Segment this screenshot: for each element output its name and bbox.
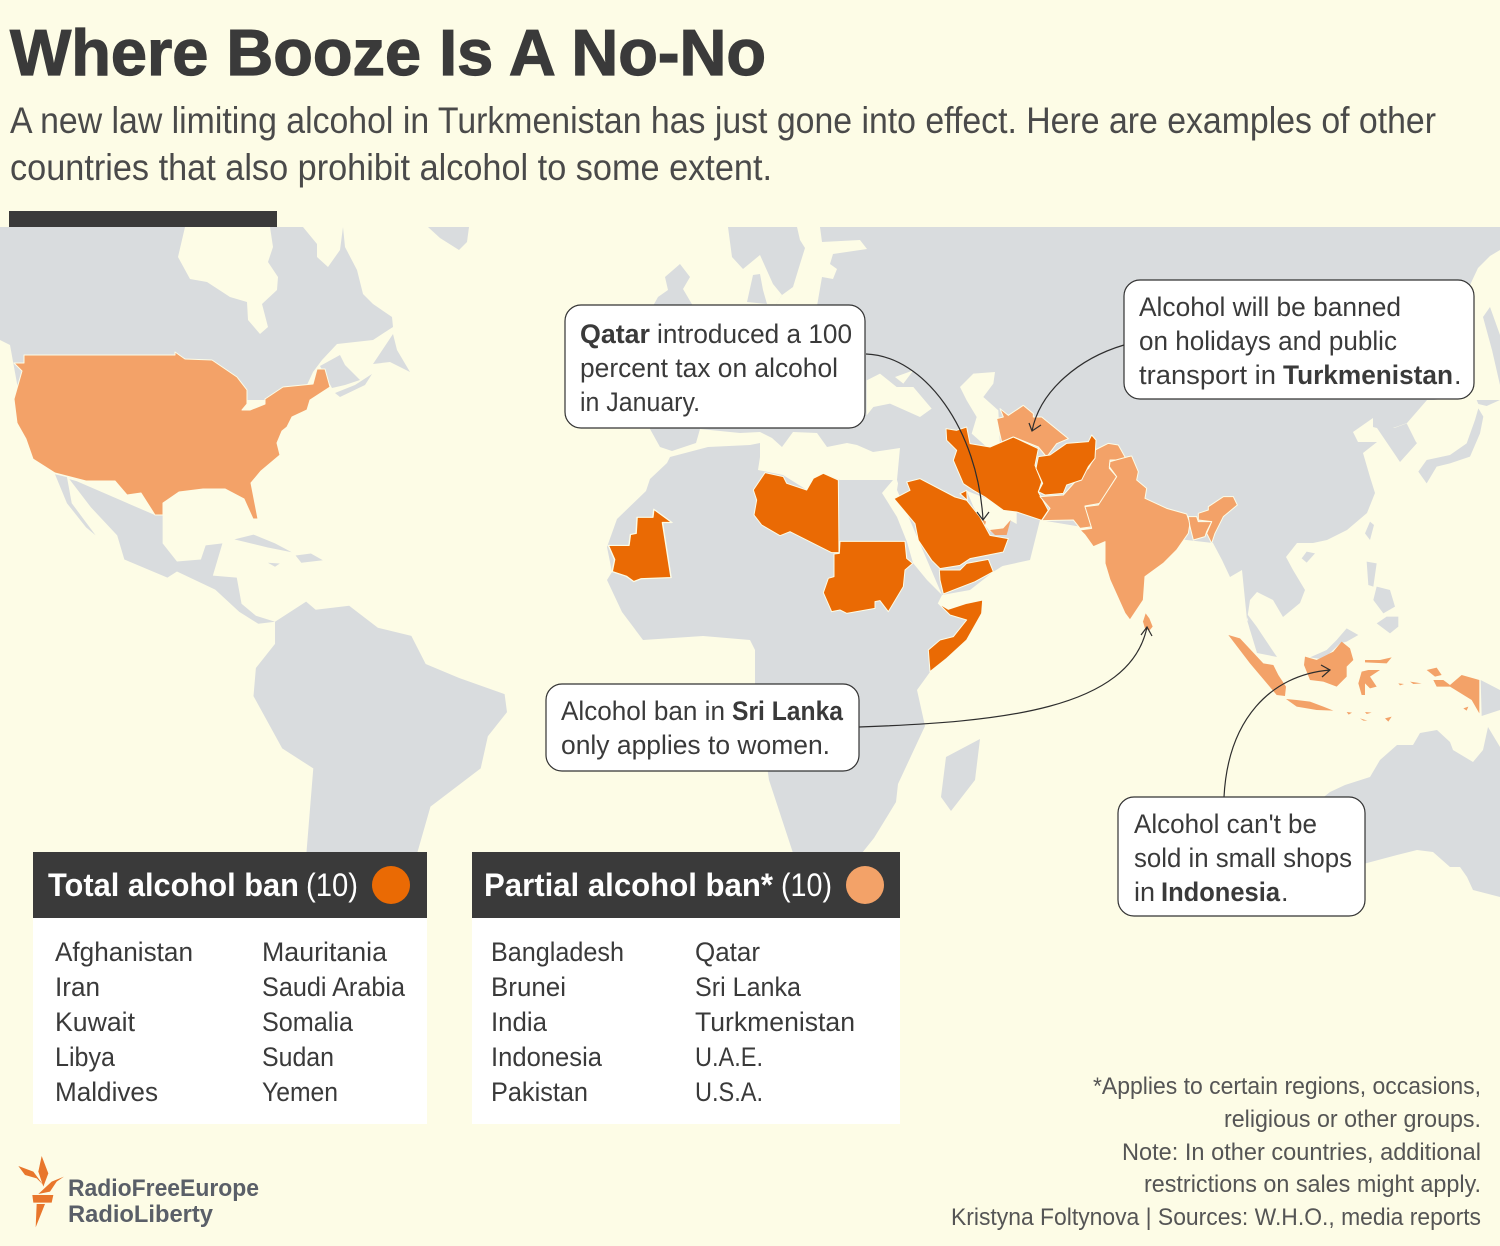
callout: Qatar bbox=[565, 305, 865, 428]
sea: Caspian bbox=[960, 372, 1000, 447]
panel header: partial ban: (10) bbox=[781, 867, 832, 903]
callout: Indonesia: Alcohol can't be bbox=[1134, 809, 1317, 839]
callout: Sri Lanka: Alcohol ban in bbox=[561, 696, 725, 726]
world map bbox=[0, 227, 1500, 897]
country: Yemen bbox=[939, 559, 993, 594]
footnotes and sources: Kristyna Foltynova | Sources: W.H.O., media reports bbox=[951, 1204, 1481, 1231]
land: Sakhalin bbox=[1483, 307, 1500, 385]
footnotes and sources: restrictions on sales might apply. bbox=[1144, 1171, 1481, 1198]
country: Sri Lanka bbox=[1143, 613, 1153, 631]
list: partial ban countries: Indonesia bbox=[491, 1042, 603, 1072]
footnotes and sources: Note: In other countries, additional bbox=[1122, 1139, 1481, 1166]
callout: Turkmenistan: Turkmenistan bbox=[1283, 360, 1453, 390]
country: Somalia bbox=[928, 600, 983, 672]
callout: Indonesia: in bbox=[1134, 877, 1155, 907]
land: Madagascar bbox=[941, 739, 980, 811]
list: partial ban countries: Qatar bbox=[695, 937, 760, 967]
icon: torch bbox=[18, 1156, 64, 1227]
list: partial ban countries: Brunei bbox=[491, 972, 566, 1002]
list: partial ban countries: Sri Lanka bbox=[695, 972, 802, 1002]
callout: Indonesia: Indonesia bbox=[1161, 877, 1281, 907]
sea: Persian Gulf bbox=[967, 491, 1017, 532]
land: Eurasia bbox=[650, 227, 1500, 657]
list: partial ban countries: Bangladesh bbox=[491, 937, 624, 967]
list: total ban countries: Sudan bbox=[262, 1042, 334, 1072]
title: Where Booze Is A No-No bbox=[10, 16, 766, 89]
subtitle bbox=[10, 100, 1436, 188]
land: Philippines bbox=[1367, 562, 1398, 633]
list: total ban countries: Iran bbox=[55, 972, 100, 1002]
title accent bar bbox=[9, 211, 277, 227]
arrow: Indonesia bbox=[1224, 665, 1330, 797]
callout: Qatar: Qatar bbox=[580, 319, 650, 349]
panel: total alcohol ban bbox=[33, 852, 427, 1124]
country: Pakistan bbox=[1040, 443, 1127, 528]
land: Australia bbox=[1320, 727, 1500, 897]
country: Iran bbox=[946, 427, 1048, 520]
list: total ban countries: Kuwait bbox=[55, 1007, 135, 1037]
callout: Sri Lanka bbox=[546, 684, 859, 771]
panel header: partial ban bbox=[472, 852, 900, 918]
list: total ban countries: Saudi Arabia bbox=[262, 972, 406, 1002]
footnotes and sources: *Applies to certain regions, occasions, bbox=[1093, 1073, 1481, 1100]
callout: Turkmenistan: transport in bbox=[1139, 360, 1276, 390]
land: Caribbean islands bbox=[234, 535, 323, 567]
land: New Brunswick and Nova Scotia bbox=[320, 355, 372, 397]
subtitle: countries that also prohibit alcohol to some extent. bbox=[10, 147, 772, 188]
country: Saudi Arabia bbox=[894, 479, 1008, 569]
land: Africa bbox=[607, 443, 983, 853]
land: Japan bbox=[1418, 400, 1500, 483]
country: Afghanistan bbox=[1036, 435, 1096, 495]
panel: partial alcohol ban bbox=[472, 852, 900, 1124]
callout: Qatar: introduced a 100 bbox=[657, 319, 852, 349]
list: total ban countries: Afghanistan bbox=[55, 937, 193, 967]
country: India bbox=[1080, 456, 1237, 620]
list: total ban countries bbox=[33, 918, 427, 1124]
logo wordmark: RadioFreeEurope bbox=[68, 1175, 259, 1202]
logo wordmark bbox=[68, 1175, 259, 1228]
land: Mexico and Central America bbox=[69, 479, 275, 624]
callout: Qatar: percent tax on alcohol bbox=[580, 353, 838, 383]
panel header: total ban: (10) bbox=[306, 867, 358, 903]
list: total ban countries: Yemen bbox=[262, 1077, 338, 1107]
land: Greenland bbox=[428, 227, 469, 250]
callout: Indonesia: sold in small shops bbox=[1134, 843, 1352, 873]
panel header: total ban: Total alcohol ban bbox=[48, 867, 299, 903]
country: Papua (Indonesia) bbox=[1427, 668, 1479, 713]
land: northern Borneo bbox=[1310, 628, 1358, 659]
panel header: partial ban: Partial alcohol ban* bbox=[484, 867, 774, 903]
sea: Black Sea bbox=[867, 370, 932, 417]
callout: Turkmenistan: . bbox=[1454, 360, 1462, 390]
list: total ban countries: Libya bbox=[55, 1042, 116, 1072]
list: partial ban countries bbox=[472, 918, 900, 1124]
list: total ban countries: Mauritania bbox=[262, 937, 388, 967]
country: Java and eastern islands (Indonesia) bbox=[1286, 657, 1468, 722]
list: total ban countries: Maldives bbox=[55, 1077, 158, 1107]
country: Qatar bbox=[983, 519, 986, 525]
callout: Turkmenistan bbox=[1124, 280, 1474, 399]
land: Malay peninsula bbox=[1247, 613, 1277, 657]
callout: Sri Lanka: Sri Lanka bbox=[732, 696, 844, 726]
list: partial ban countries: U.S.A. bbox=[695, 1077, 763, 1107]
logo: RadioFreeEurope RadioLiberty bbox=[18, 1156, 259, 1228]
callout: Indonesia: . bbox=[1281, 877, 1289, 907]
list: partial ban countries: U.A.E. bbox=[695, 1042, 763, 1072]
land: South America bbox=[253, 602, 507, 857]
footnotes and sources: religious or other groups. bbox=[1224, 1106, 1481, 1133]
land: Baja California bbox=[55, 474, 96, 535]
sea: Baltic bbox=[775, 227, 867, 306]
logo wordmark: RadioLiberty bbox=[68, 1201, 214, 1228]
arrow: Qatar bbox=[866, 354, 989, 520]
country: Sumatra (Indonesia) bbox=[1228, 635, 1286, 696]
land: Arabian peninsula bbox=[897, 470, 1040, 595]
arrow: Sri Lanka bbox=[859, 627, 1152, 727]
callout: Turkmenistan: Alcohol will be banned bbox=[1139, 292, 1401, 322]
callout: Indonesia bbox=[1118, 797, 1365, 916]
list: total ban countries: Somalia bbox=[262, 1007, 354, 1037]
land: Korea bbox=[1393, 423, 1417, 462]
country: Sudan bbox=[823, 541, 913, 613]
land: Newfoundland bbox=[373, 334, 410, 372]
arrow: Turkmenistan bbox=[1029, 345, 1124, 431]
country: Bangladesh bbox=[1188, 517, 1212, 540]
country: Mauritania bbox=[608, 509, 672, 582]
callout: Turkmenistan: on holidays and public bbox=[1139, 326, 1397, 356]
country: Borneo (Indonesia) bbox=[1304, 642, 1353, 687]
country: U.A.E. bbox=[990, 520, 1011, 535]
footnotes and sources bbox=[951, 1073, 1481, 1231]
panel header: total ban bbox=[33, 852, 427, 918]
land: Papua New Guinea bbox=[1481, 680, 1500, 716]
country: Sulawesi (Indonesia) bbox=[1358, 670, 1380, 695]
list: partial ban countries: Turkmenistan bbox=[695, 1007, 855, 1037]
land: Britain and Denmark bbox=[653, 264, 767, 306]
country: U.S.A. bbox=[14, 352, 330, 519]
country: Turkmenistan bbox=[997, 405, 1068, 457]
country: Kuwait bbox=[960, 490, 967, 500]
callout: Qatar: in January. bbox=[580, 387, 700, 417]
callout: Sri Lanka: only applies to women. bbox=[561, 730, 830, 760]
list: partial ban countries: India bbox=[491, 1007, 548, 1037]
land: Taiwan and Hainan bbox=[1302, 522, 1374, 563]
land: Canada bbox=[0, 227, 393, 400]
country: Libya bbox=[753, 473, 839, 553]
list: partial ban countries: Pakistan bbox=[491, 1077, 588, 1107]
